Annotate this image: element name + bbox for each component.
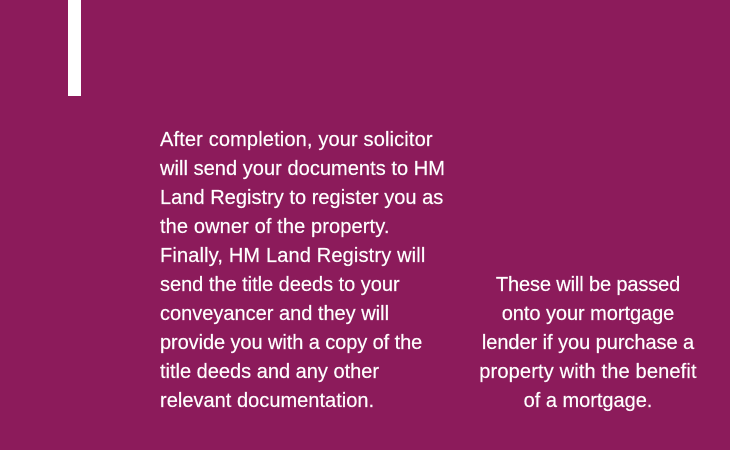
text block: after completion: relevant documentation. <box>160 390 374 412</box>
text block: mortgage lender: property with the benefit <box>479 361 697 383</box>
text block: after completion: Land Registry to register you as <box>160 187 443 209</box>
text block: after completion: send the title deeds to your <box>160 274 400 296</box>
text block: after completion: provide you with a copy of the <box>160 332 422 354</box>
text block: mortgage lender: onto your mortgage <box>502 303 674 325</box>
text block: after completion: will send your documents to HM <box>160 158 445 180</box>
decorative white vertical bar <box>68 0 81 96</box>
text block: after completion: Finally, HM Land Registry will <box>160 245 425 267</box>
text block: after completion: the owner of the property. <box>160 216 390 238</box>
text block: mortgage lender: of a mortgage. <box>524 390 652 412</box>
text block: after completion: conveyancer and they will <box>160 303 389 325</box>
text block: mortgage lender: lender if you purchase a <box>482 332 694 354</box>
text block: after completion: title deeds and any other <box>160 361 379 383</box>
text block: mortgage lender: These will be passed <box>496 274 680 296</box>
text block: after completion: After completion, your solicitor <box>160 129 433 151</box>
text block: mortgage lender <box>479 274 697 412</box>
